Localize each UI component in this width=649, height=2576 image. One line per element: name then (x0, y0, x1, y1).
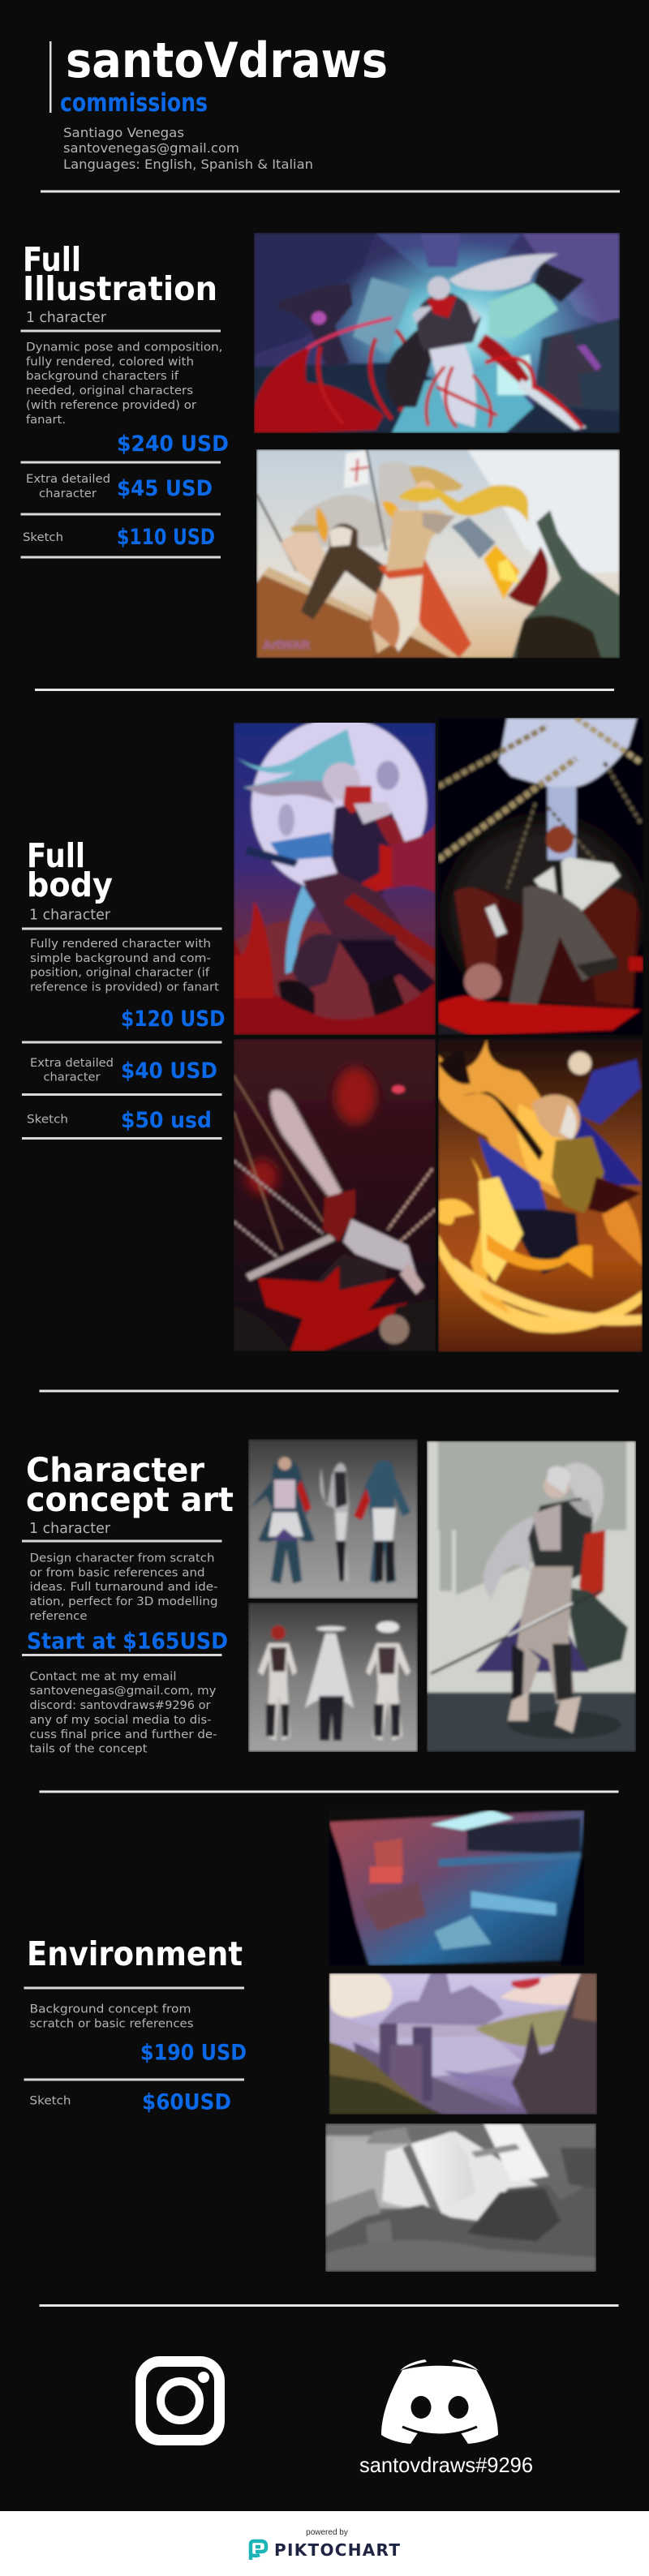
panel: character concept art text: 1 character (29, 1521, 111, 1537)
artwork: musketeer in straw hat (256, 449, 620, 659)
icon: piktochart logo (251, 2541, 266, 2560)
description: Dynamic pose and composition, (26, 341, 222, 354)
price: $190 USD (140, 2041, 247, 2065)
contact note: cuss final price and further de- (29, 1728, 217, 1741)
cross (499, 718, 637, 831)
torso (331, 800, 408, 897)
heading: Illustration (23, 269, 217, 308)
saw (269, 1089, 343, 1201)
contact note: any of my social media to dis- (29, 1714, 211, 1727)
torso (386, 510, 451, 571)
sketch price (27, 1108, 212, 1133)
ground (234, 920, 436, 1035)
hair and cape (561, 1463, 604, 1530)
description: ideas. Full turnaround and ide- (29, 1581, 217, 1594)
extra character price: character (39, 487, 97, 500)
price: Start at $165USD (27, 1627, 228, 1655)
shirt (552, 1136, 604, 1213)
blood shards (258, 1266, 408, 1351)
flame arcs (438, 1234, 643, 1333)
description: simple background and com- (30, 952, 211, 965)
artwork: man on throne with chains (438, 718, 643, 1035)
right tower (512, 1973, 597, 2114)
chains (438, 726, 548, 787)
hat and hair (409, 466, 463, 492)
figure (323, 1189, 355, 1242)
footer: powered by (306, 2528, 348, 2537)
contact details (63, 125, 313, 172)
legs (514, 1567, 574, 1708)
katana (431, 1591, 601, 1674)
contact note: santovenegas@gmail.com, my (29, 1685, 217, 1698)
extra character price: $45 USD (117, 476, 213, 501)
gun (451, 517, 496, 559)
description: ation, perfect for 3D modelling (29, 1595, 217, 1608)
foreground rubble (325, 2180, 596, 2272)
figure front (271, 1625, 286, 1640)
artwork: chainsaw man (234, 1039, 436, 1351)
description (30, 938, 220, 994)
heading: Full (27, 836, 85, 875)
skull, knife, blood (438, 996, 641, 1035)
title: santoVdraws (66, 32, 388, 89)
description: Fully rendered character with (30, 938, 211, 951)
river (370, 2037, 524, 2079)
hero (386, 330, 436, 407)
description: background characters if (26, 370, 179, 383)
discord handle: santovdraws#9296 (359, 2453, 533, 2477)
description: position, original character (if (30, 967, 210, 980)
extra character price: $40 USD (121, 1058, 217, 1084)
heading (26, 1450, 234, 1519)
panel: full body text (22, 836, 226, 1140)
artwork: greyscale sketch (325, 2123, 596, 2272)
icon: instagram (135, 2356, 225, 2445)
extra character price (26, 473, 213, 501)
hill (329, 2042, 435, 2114)
blue leg (479, 1136, 548, 1213)
sketch price (23, 525, 215, 550)
description: Design character from scratch (29, 1552, 214, 1565)
heading: Environment (27, 1934, 243, 1973)
sketch price: $50 usd (121, 1108, 212, 1133)
heading: Character (26, 1450, 205, 1489)
subtitle: commissions (60, 88, 208, 118)
figure (546, 826, 574, 853)
sketch price: $110 USD (117, 525, 215, 550)
red arm (579, 1530, 605, 1603)
heroine legs and coat (301, 523, 386, 620)
extra character price (30, 1057, 217, 1084)
sketch price: Sketch (23, 531, 63, 544)
description (26, 341, 222, 427)
footer: PIKTOCHART (274, 2540, 400, 2560)
victim (512, 510, 620, 659)
description (29, 2003, 193, 2031)
sketch price (29, 2089, 231, 2115)
figure front (250, 1460, 315, 1583)
artwork: castle landscape (329, 1973, 597, 2114)
description: Background concept from (29, 2003, 191, 2016)
artwork: flame kick (438, 1039, 643, 1352)
torso (528, 1497, 593, 1578)
icon: discord (381, 2359, 498, 2444)
extra character price: character (44, 1071, 101, 1084)
hand (569, 1052, 591, 1075)
small soldier (290, 525, 320, 533)
left enemy (278, 283, 353, 367)
contact note: tails of the concept (29, 1742, 148, 1755)
gate wall (354, 2042, 512, 2114)
blood swoosh (234, 938, 436, 1035)
figure right (376, 1621, 399, 1633)
sketch price: Sketch (29, 2094, 71, 2107)
panel: full illustration text (21, 240, 229, 558)
hair (236, 729, 355, 800)
contact details: santovenegas@gmail.com (63, 140, 239, 156)
figure back (354, 1460, 410, 1583)
artwork: cyberpunk swordswoman (254, 233, 620, 433)
artwork: sci-fi interior (329, 1810, 585, 1966)
sleeve (572, 1059, 641, 1124)
skirt & sword (303, 873, 410, 940)
right enemy (546, 334, 603, 407)
description: fanart. (26, 414, 66, 427)
description: (with reference provided) or (26, 399, 196, 412)
red blood (254, 346, 384, 433)
cape back (565, 1586, 628, 1672)
description: reference is provided) or fanart (30, 981, 220, 994)
head (531, 1095, 580, 1140)
artwork: character illustration with katana (427, 1440, 636, 1752)
heading: body (27, 865, 113, 904)
sketch price: $60USD (142, 2089, 231, 2115)
contact note: discord: santovdraws#9296 or (29, 1699, 211, 1712)
logo: ArtWAR (263, 638, 310, 652)
contact details: Languages: English, Spanish & Italian (63, 157, 313, 172)
legs (292, 934, 396, 998)
panel: environment text (24, 1934, 247, 2115)
price: $240 USD (117, 431, 229, 457)
footer (0, 2511, 649, 2576)
sketch price: Sketch (27, 1113, 68, 1126)
header (49, 32, 388, 172)
extra character price: Extra detailed (26, 473, 110, 486)
artwork: turnaround sheet two (248, 1603, 418, 1752)
extra character price: Extra detailed (30, 1057, 114, 1070)
wood crate (256, 567, 378, 659)
contact note (29, 1671, 217, 1755)
artwork: turnaround sheet one (248, 1439, 418, 1599)
panel: full illustration text: 1 character (26, 310, 107, 326)
contact details: Santiago Venegas (63, 125, 184, 140)
panel: full body text: 1 character (29, 907, 111, 923)
heading: Full (23, 240, 81, 279)
description: or from basic references and (29, 1567, 205, 1580)
heading (27, 836, 113, 904)
chair (454, 887, 641, 1010)
description: scratch or basic references (29, 2018, 193, 2031)
description: needed, original characters (26, 384, 193, 397)
contact note: Contact me at my email (29, 1671, 176, 1684)
figure cape (316, 1626, 346, 1631)
description: fully rendered, colored with (26, 355, 194, 368)
heading: concept art (26, 1480, 234, 1519)
description (29, 1552, 217, 1623)
panel: character concept art text (22, 1450, 234, 1755)
description: reference (29, 1610, 88, 1623)
lines (234, 1075, 323, 1250)
price: $120 USD (121, 1007, 226, 1032)
figure side (320, 1463, 349, 1582)
artwork: moon swordswoman (234, 723, 436, 1035)
heading (23, 240, 217, 308)
